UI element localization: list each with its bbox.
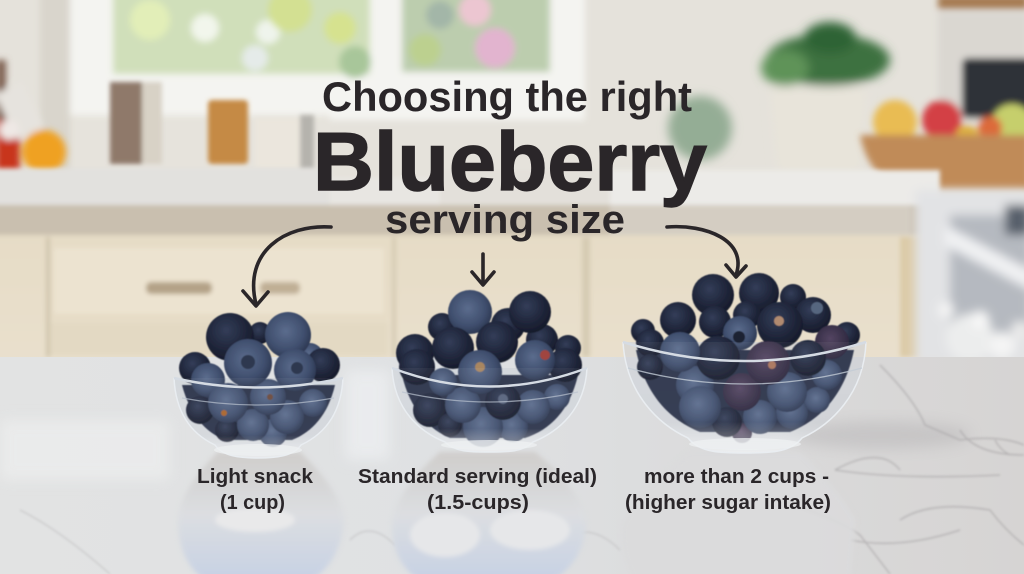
marble veins [20, 365, 1024, 574]
reflection: medium bowl [392, 452, 586, 574]
label: light snack: (1 cup) [220, 491, 285, 514]
arrow: to large bowl [667, 227, 746, 277]
label: light snack: Light snack [197, 465, 314, 488]
arrow: to small bowl [243, 227, 331, 306]
glass bowl back [623, 342, 866, 453]
title line 1: Choosing the right [322, 73, 692, 120]
medium bowl: standard serving [392, 290, 587, 452]
glass bowl back [174, 378, 343, 458]
large bowl: more than 2 cups [623, 273, 866, 453]
arrow: to medium bowl [472, 254, 494, 285]
canisters on the sill [110, 82, 314, 170]
blueberries in medium bowl [396, 290, 582, 447]
bowl reflections [178, 452, 856, 574]
label: standard serving: Standard serving (ideal) [358, 465, 597, 488]
glass bowl small [174, 378, 343, 458]
left bottles and orange [0, 60, 66, 180]
label: light snack [197, 465, 314, 514]
window frame [40, 0, 585, 180]
appliance and fruit bowl [860, 0, 1024, 190]
glare between bowls [345, 370, 390, 460]
glare on left of the counter [0, 420, 170, 480]
label: more than 2 cups: more than 2 cups - [644, 465, 829, 488]
label: standard serving: (1.5-cups) [427, 491, 529, 514]
stove at right [915, 190, 1024, 365]
blueberries in large bowl [631, 273, 860, 443]
title [313, 73, 707, 242]
label: standard serving [358, 465, 597, 514]
reflection: small bowl [178, 452, 344, 574]
title line 3: serving size [385, 198, 625, 242]
glass bowl large [623, 342, 866, 453]
marble countertop [0, 357, 1024, 574]
glass bowl medium [392, 368, 587, 452]
small bowl: light snack [174, 312, 343, 458]
counter and cabinets [0, 168, 950, 365]
glass bowl back [392, 368, 587, 452]
label: more than 2 cups: (higher sugar intake) [625, 491, 831, 514]
window panes [113, 0, 550, 78]
title line 2: Blueberry: Blueberry [313, 115, 707, 208]
marble shading right of bowl [790, 421, 970, 449]
blueberries in small bowl [179, 312, 340, 447]
reflection: large bowl [621, 452, 856, 574]
label: more than 2 cups [625, 465, 831, 514]
plants [668, 22, 890, 172]
